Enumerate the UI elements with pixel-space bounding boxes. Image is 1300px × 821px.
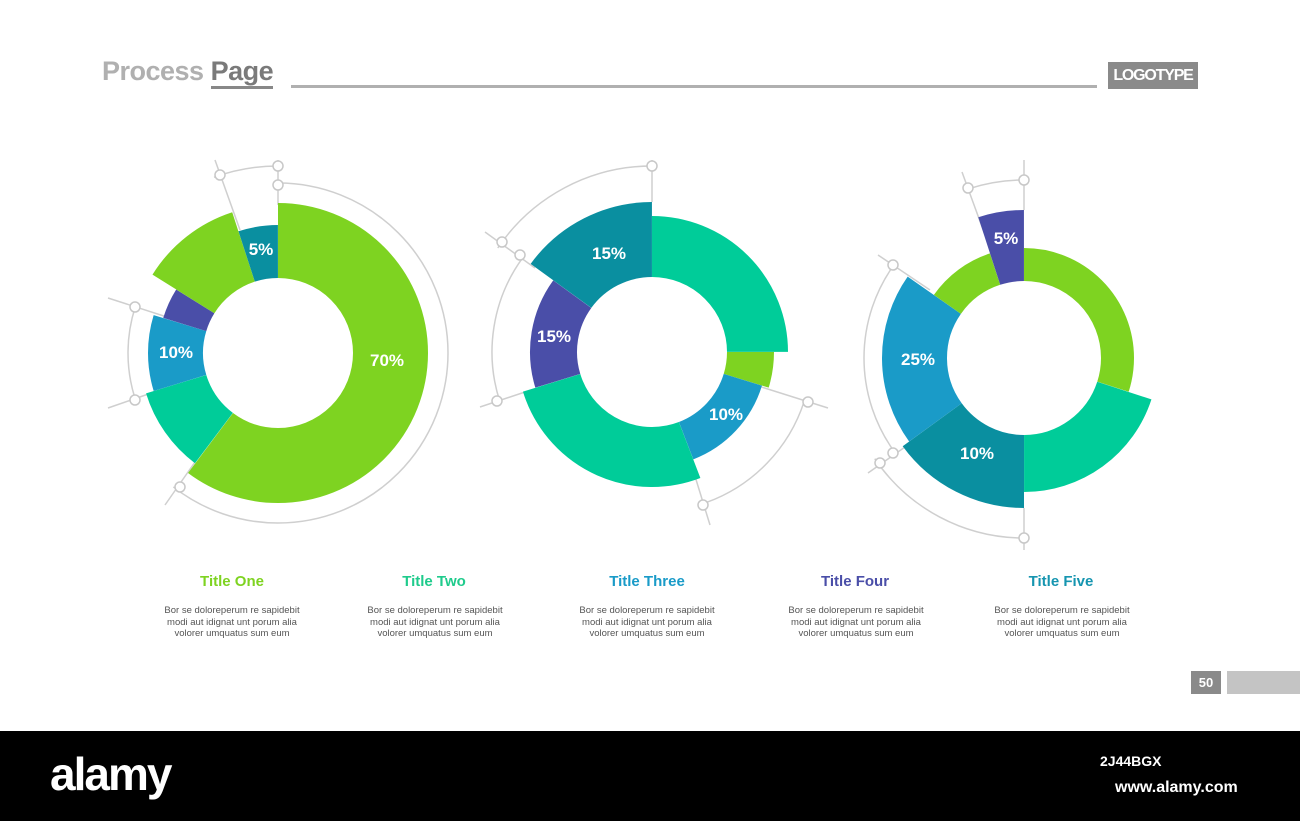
text: Title Three	[609, 573, 685, 590]
footer bar	[0, 731, 1300, 821]
text: volorer umquatus sum eum	[798, 628, 914, 639]
percentage labels: 25%	[901, 350, 935, 369]
logotype	[1108, 62, 1198, 89]
text: modi aut idignat unt porum alia	[370, 616, 500, 628]
text: Bor se doloreperum re sapidebit	[367, 605, 503, 616]
footer bar: www.alamy.com	[1115, 779, 1238, 796]
percentage labels: 70%	[370, 351, 404, 370]
text: modi aut idignat unt porum alia	[997, 616, 1127, 628]
text: volorer umquatus sum eum	[174, 628, 290, 639]
text: Bor se doloreperum re sapidebit	[994, 605, 1130, 616]
text: volorer umquatus sum eum	[1004, 628, 1120, 639]
charts	[108, 160, 1152, 550]
percentage labels: 10%	[159, 343, 193, 362]
text: modi aut idignat unt porum alia	[791, 616, 921, 628]
text: volorer umquatus sum eum	[377, 628, 493, 639]
titles and descriptions: Title One	[200, 573, 264, 590]
percentage labels: 15%	[592, 244, 626, 263]
percentage labels: 10%	[960, 444, 994, 463]
text: modi aut idignat unt porum alia	[582, 616, 712, 628]
text: Title Five	[1029, 573, 1093, 590]
text: modi aut idignat unt porum alia	[167, 616, 297, 628]
text: Bor se doloreperum re sapidebit	[788, 605, 924, 616]
page number	[1191, 671, 1221, 694]
text: Bor se doloreperum re sapidebit	[164, 605, 300, 616]
percentage labels: 5%	[249, 240, 273, 259]
chart 3	[871, 205, 1177, 511]
percentage labels: 10%	[709, 405, 743, 424]
footer bar: 2J44BGX	[1100, 753, 1161, 769]
logotype: LOGOTYPE	[1113, 67, 1193, 84]
chart 1	[124, 199, 432, 507]
text: Title Four	[821, 573, 889, 590]
footer bar: alamy	[50, 748, 170, 800]
chart 2	[495, 195, 809, 509]
page number: 50	[1199, 675, 1213, 690]
percentage labels: 5%	[994, 229, 1018, 248]
header title: Process Page	[102, 56, 273, 86]
text: Bor se doloreperum re sapidebit	[579, 605, 715, 616]
text: volorer umquatus sum eum	[589, 628, 705, 639]
percentage labels: 15%	[537, 327, 571, 346]
text: Title Two	[402, 573, 466, 590]
percentage labels	[159, 229, 1018, 463]
